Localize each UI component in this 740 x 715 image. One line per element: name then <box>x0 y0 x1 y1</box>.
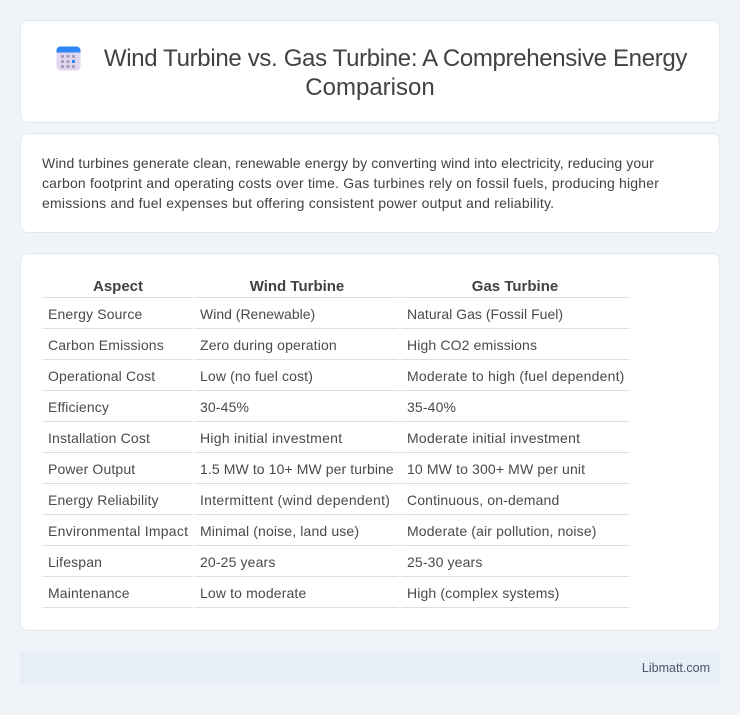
title <box>104 45 688 101</box>
table: wind vs gas turbine: 30-45% <box>200 399 249 415</box>
icon: calendar <box>56 46 80 70</box>
table: wind vs gas turbine: Moderate (air pollution, noise) <box>407 523 597 539</box>
footer credit: Libmatt.com <box>642 661 710 675</box>
table: wind vs gas turbine: Natural Gas (Fossil Fuel) <box>407 306 563 322</box>
table: wind vs gas turbine: Zero during operation <box>200 337 337 353</box>
panel: introduction text <box>20 133 720 233</box>
text block: summary: emissions and fuel expenses but offering consistent power output and reliability. <box>42 195 554 211</box>
panel: title header <box>20 20 720 123</box>
table: wind vs gas turbine: Installation Cost <box>48 430 150 446</box>
table: wind vs gas turbine: Low to moderate <box>200 585 306 601</box>
table: wind vs gas turbine: Low (no fuel cost) <box>200 368 313 384</box>
title: Wind Turbine vs. Gas Turbine: A Comprehensive Energy <box>104 45 687 72</box>
text block: summary <box>42 155 659 211</box>
table: wind vs gas turbine: Continuous, on-demand <box>407 492 559 508</box>
table: wind vs gas turbine: 25-30 years <box>407 554 482 570</box>
table: wind vs gas turbine: Environmental Impact <box>48 523 188 539</box>
table: wind vs gas turbine: 20-25 years <box>200 554 275 570</box>
table: wind vs gas turbine: Minimal (noise, land use) <box>200 523 359 539</box>
table: wind vs gas turbine: Efficiency <box>48 399 109 415</box>
table: wind vs gas turbine: 35-40% <box>407 399 456 415</box>
table: wind vs gas turbine: Power Output <box>48 461 135 477</box>
table: wind vs gas turbine: High (complex systems) <box>407 585 559 601</box>
table: wind vs gas turbine: High initial investment <box>200 430 342 446</box>
footer <box>20 651 720 685</box>
table: wind vs gas turbine: High CO2 emissions <box>407 337 537 353</box>
table: wind vs gas turbine: 1.5 MW to 10+ MW per turbine <box>200 461 394 477</box>
table: wind vs gas turbine: Gas Turbine <box>472 278 558 294</box>
table: wind vs gas turbine: Aspect <box>93 278 143 294</box>
table: wind vs gas turbine: Operational Cost <box>48 368 155 384</box>
table: wind vs gas turbine: Maintenance <box>48 585 130 601</box>
text block: summary: carbon footprint and operating costs over time. Gas turbines rely on fossil fuels, producing higher <box>42 175 659 191</box>
table: wind vs gas turbine: Moderate initial investment <box>407 430 580 446</box>
table: wind vs gas turbine: Wind Turbine <box>250 278 344 294</box>
table: wind vs gas turbine: Wind (Renewable) <box>200 306 315 322</box>
table: wind vs gas turbine: Moderate to high (fuel dependent) <box>407 368 625 384</box>
table: wind vs gas turbine: Carbon Emissions <box>48 337 164 353</box>
table: wind vs gas turbine: Energy Source <box>48 306 142 322</box>
title: Comparison <box>305 74 435 101</box>
table: wind vs gas turbine: Energy Reliability <box>48 492 159 508</box>
table: wind vs gas turbine <box>43 278 629 608</box>
table: wind vs gas turbine: Lifespan <box>48 554 102 570</box>
panel: comparison table <box>20 253 720 631</box>
text block: summary: Wind turbines generate clean, renewable energy by converting wind into electricity, reducing your <box>42 155 654 171</box>
table: wind vs gas turbine: Intermittent (wind dependent) <box>200 492 390 508</box>
table: wind vs gas turbine: 10 MW to 300+ MW per unit <box>407 461 585 477</box>
